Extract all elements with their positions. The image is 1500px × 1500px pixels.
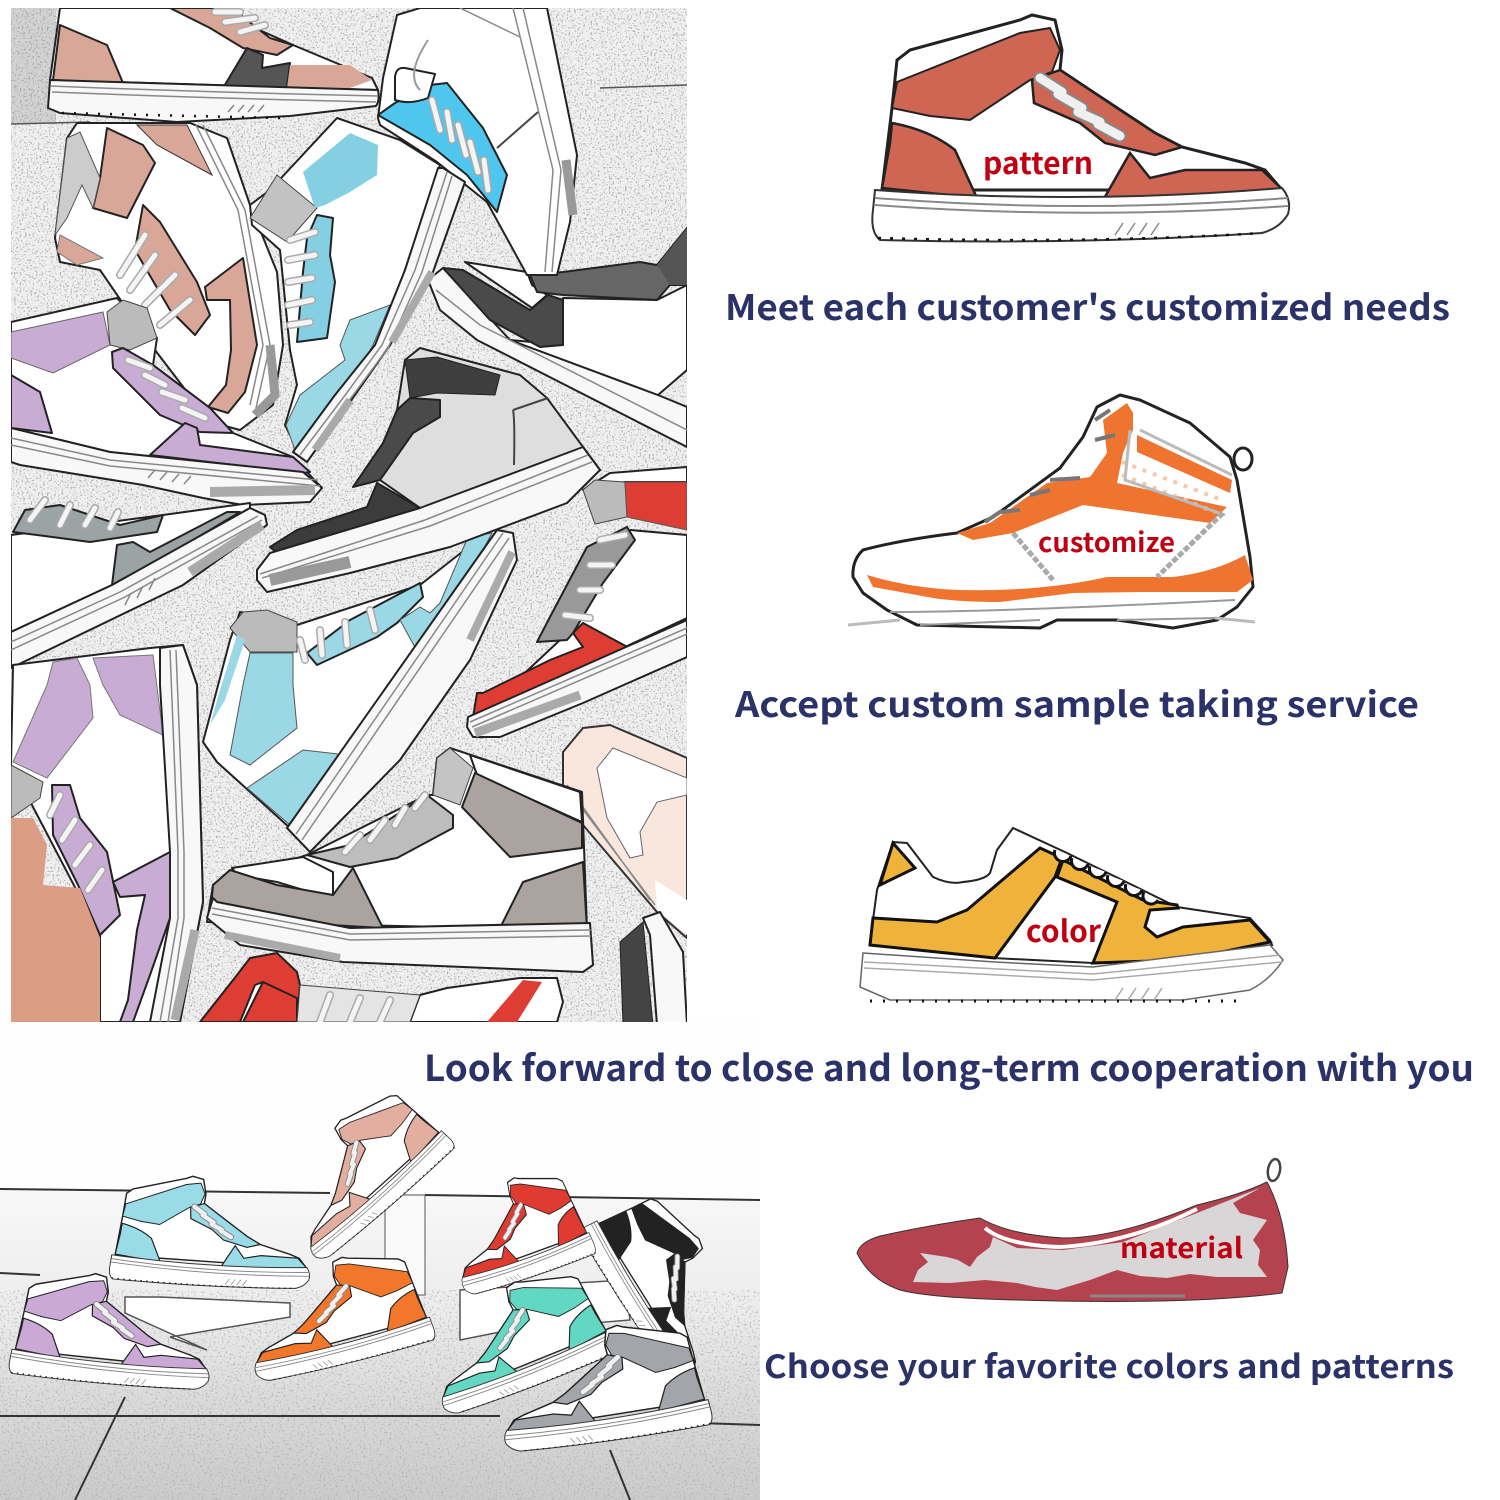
sneaker: light blue vertical: [250, 118, 465, 462]
sneaker: pale pink right: [563, 725, 687, 938]
panel: sneakers group photo: [0, 1095, 760, 1500]
sneaker: grey: [504, 1324, 712, 1452]
sneaker: taupe: [207, 748, 593, 972]
shoe: material flat: [857, 1158, 1288, 1301]
sneaker: purple: [8, 1272, 210, 1390]
sneaker: salmon vertical: [55, 123, 283, 430]
shoe: color low top: [860, 828, 1283, 1001]
sneaker: black low at right: [428, 228, 687, 447]
panel: scattered sneakers collage: [11, 8, 687, 1025]
sneaker: black bottom right: [620, 912, 687, 1025]
sneaker: black and grey center: [257, 348, 600, 592]
sneaker: white shoe with cyan lace panel: [378, 8, 577, 275]
sneaker: purple big left: [11, 645, 203, 1022]
sneaker: black: [584, 1198, 704, 1365]
sneaker: red right: [467, 467, 687, 737]
sneaker: red bottom: [200, 953, 563, 1022]
label: pattern: pattern: [983, 139, 1093, 183]
sneaker: salmon low at top: [48, 8, 379, 122]
box pedestal right: [460, 1280, 630, 1340]
label: material: material: [1120, 1227, 1243, 1267]
label: color: color: [1026, 907, 1102, 951]
heading: colors and patterns: Choose your favorite colors and patterns: [764, 1342, 1454, 1388]
sneaker: teal: [442, 1276, 606, 1414]
sneaker: light blue: [109, 1171, 316, 1293]
shoe: pattern: [872, 15, 1289, 241]
label: customize: customize: [1038, 521, 1175, 560]
box pedestal center: [385, 1195, 425, 1295]
box pedestal left: [125, 1297, 290, 1350]
sneaker: orange: [254, 1256, 436, 1381]
sneaker: pink: [310, 1095, 455, 1259]
sneaker: purple left: [11, 298, 322, 505]
shoe: customize boot: [848, 395, 1255, 628]
heading: cooperation: Look forward to close and long-term cooperation with you: [424, 1040, 1474, 1092]
heading: sample taking service: Accept custom sample taking service: [734, 677, 1419, 728]
sneaker: grey low left: [11, 500, 267, 668]
sneaker: red: [462, 1177, 596, 1294]
sneaker: light blue center: [203, 530, 517, 852]
heading: customized needs: Meet each customer's customized needs: [725, 280, 1450, 331]
